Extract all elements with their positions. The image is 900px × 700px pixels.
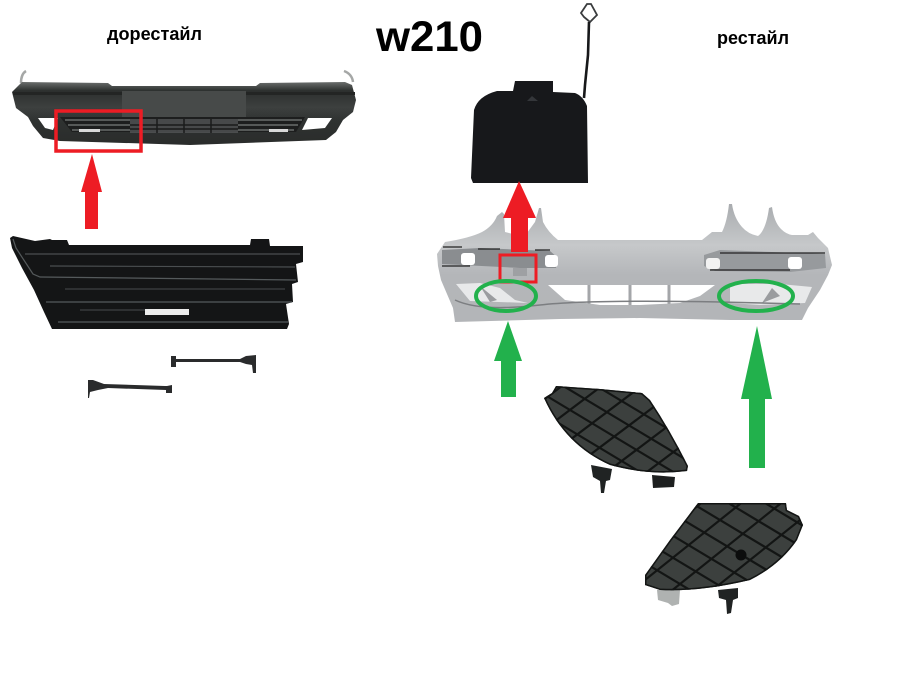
silver facelift bumper — [437, 204, 832, 322]
black louvred grille — [10, 236, 303, 329]
green ellipse: right fog lamp — [719, 281, 793, 311]
black tow-eye cover with cord — [471, 4, 597, 183]
small clips — [88, 355, 256, 398]
heading: рестайл: рестайл — [717, 28, 789, 48]
red arrow pointing at bumper grille — [81, 154, 102, 229]
red highlight box on dark bumper — [56, 111, 141, 151]
mesh fog grille: left — [544, 386, 688, 493]
title: w210: w210 — [375, 13, 483, 61]
red arrow pointing at tow-eye cover — [503, 181, 536, 252]
dark pre-facelift bumper — [12, 71, 356, 145]
red highlight box on silver bumper — [500, 255, 536, 282]
green arrow: left fog grille — [494, 321, 522, 397]
green ellipse: left fog lamp — [476, 281, 536, 311]
mesh fog grille: right — [645, 503, 803, 614]
green arrow: right fog grille — [741, 326, 772, 468]
heading: дорестайл: дорестайл — [107, 24, 202, 44]
